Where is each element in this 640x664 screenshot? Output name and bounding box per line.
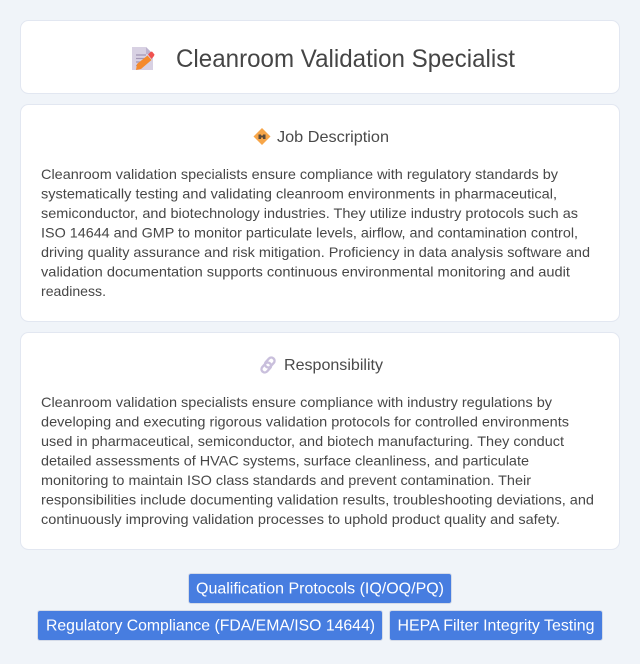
- text block: responsibility: [41, 394, 594, 527]
- tag: HEPA filter testing: [390, 610, 602, 640]
- panel: responsibility: [20, 332, 620, 550]
- text block: responsibility: continuously improving validation processes to uphold product quality and safety.: [41, 511, 560, 527]
- icon: orange diamond: [254, 128, 270, 145]
- text block: job description: Cleanroom validation specialists ensure compliance with regulatory standards by: [41, 166, 558, 182]
- text block: job description: validation documentation supports continuous environmental monitoring and audit: [41, 264, 570, 280]
- text block: responsibility: used in pharmaceutical, semiconductor, and biotech manufacturing. They conduct: [41, 433, 564, 449]
- tag: regulatory compliance: [38, 610, 382, 640]
- text block: responsibility: Cleanroom validation specialists ensure compliance with industry regulations by: [41, 394, 552, 410]
- text block: responsibility: detailed assessments of HVAC systems, surface cleanliness, and particulate: [41, 452, 529, 468]
- text block: job description: systematically testing and validating cleanroom environments in pharmaceutical,: [41, 186, 557, 202]
- tag: HEPA filter testing: HEPA Filter Integrity Testing: [398, 618, 594, 634]
- text block: responsibility: monitoring to maintain ISO class standards and prevent contamination. Their: [41, 472, 531, 488]
- heading: responsibility: Responsibility: [284, 357, 383, 374]
- tag: regulatory compliance: Regulatory Compliance (FDA/EMA/ISO 14644): [46, 618, 375, 634]
- title text: Cleanroom Validation Specialist: [176, 45, 515, 73]
- text block: job description: readiness.: [41, 283, 106, 299]
- heading: job description: Job Description: [277, 129, 389, 146]
- text block: job description: driving quality assurance and risk mitigation. Proficiency in data analysis software and: [41, 244, 590, 260]
- text block: job description: semiconductor, and biotechnology industries. They utilize industry protocols such as: [41, 205, 578, 221]
- text block: responsibility: developing and executing rigorous validation protocols for controlled environments: [41, 414, 569, 430]
- tag: qualification protocols: Qualification Protocols (IQ/OQ/PQ): [196, 580, 444, 598]
- icon: chain link: [260, 356, 276, 374]
- text block: job description: [41, 166, 590, 299]
- text block: responsibility: responsibilities include documenting validation results, troubleshooting deviations, and: [41, 492, 594, 508]
- text block: job description: ISO 14644 and GMP to monitor particulate levels, airflow, and contamination control,: [41, 224, 578, 240]
- icon: document with pencil: [132, 47, 154, 70]
- panel: job description: [20, 104, 620, 322]
- panel: title header: [20, 20, 620, 94]
- tag: qualification protocols: [188, 574, 452, 604]
